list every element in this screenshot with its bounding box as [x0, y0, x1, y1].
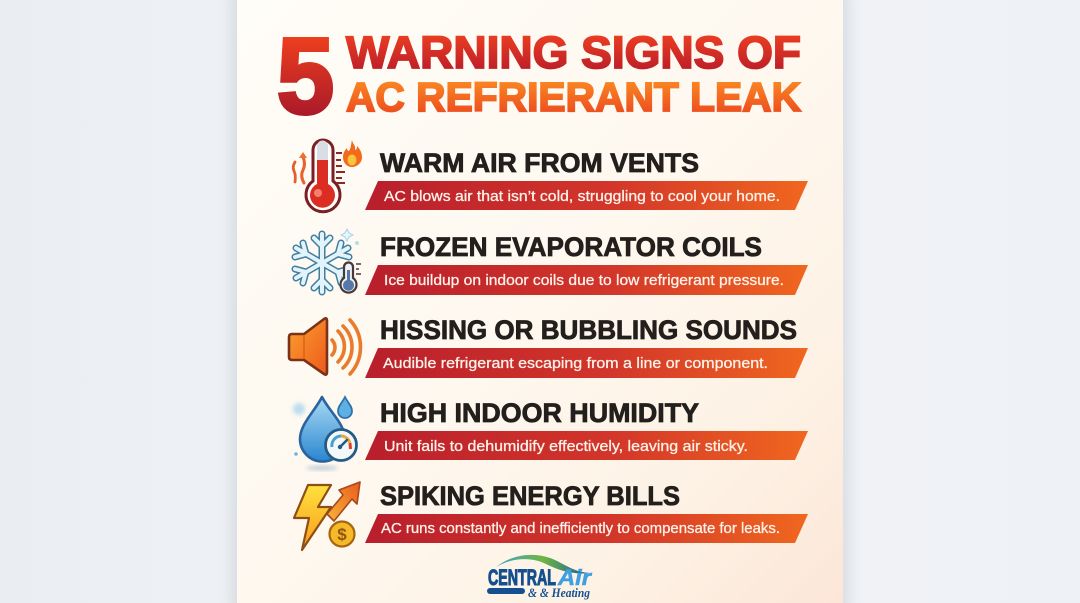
title line 1: WARNING SIGNS OF	[346, 27, 801, 78]
logo: Central Air & Heating	[487, 555, 593, 600]
icon: snowflake with thermometer	[295, 229, 361, 293]
icon: water drop with gauge	[293, 397, 356, 470]
banner	[365, 348, 808, 378]
sign 3: hissing or bubbling sounds	[289, 315, 808, 378]
heading: SPIKING ENERGY BILLS	[380, 481, 680, 511]
sign 5: spiking energy bills	[294, 481, 808, 550]
icon: lightning bolt, arrow and coin: $	[337, 525, 347, 544]
icon: lightning bolt, arrow and coin	[294, 482, 360, 550]
banner	[365, 181, 808, 210]
sign 2: frozen evaporator coils	[295, 229, 808, 295]
title	[277, 15, 801, 136]
sign 1: warm air from vents	[293, 140, 808, 212]
heading: FROZEN EVAPORATOR COILS	[380, 232, 762, 262]
description: AC runs constantly and inefficiently to compensate for leaks.	[381, 521, 780, 537]
description: Audible refrigerant escaping from a line or component.	[383, 356, 768, 372]
logo: Central Air & Heating: & & Heating	[528, 585, 590, 600]
icon: speaker with sound waves	[289, 318, 360, 375]
heading: WARM AIR FROM VENTS	[380, 148, 699, 178]
banner	[365, 265, 808, 295]
banner	[365, 431, 808, 460]
logo: Central Air & Heating: Air	[557, 565, 593, 590]
description: AC blows air that isn’t cold, struggling to cool your home.	[384, 189, 780, 205]
sign 4: high indoor humidity	[293, 397, 808, 470]
description: Ice buildup on indoor coils due to low refrigerant pressure.	[384, 273, 784, 289]
icon: thermometer with flame	[293, 140, 362, 212]
heading: HISSING OR BUBBLING SOUNDS	[380, 315, 797, 345]
heading: HIGH INDOOR HUMIDITY	[380, 398, 699, 428]
banner	[365, 514, 808, 543]
logo: Central Air & Heating: CENTRAL	[488, 565, 556, 590]
title line 2: AC REFRIERANT LEAK	[346, 74, 801, 120]
poster panel shadow	[231, 0, 849, 603]
description: Unit fails to dehumidify effectively, leaving air sticky.	[384, 439, 748, 455]
poster panel	[237, 0, 843, 603]
numeral 5: 5	[277, 15, 334, 136]
